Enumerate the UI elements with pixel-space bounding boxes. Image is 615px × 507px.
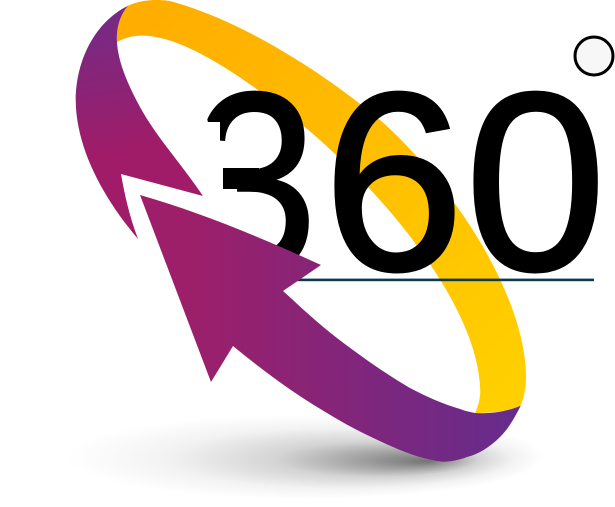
degree circle bbox=[575, 37, 613, 75]
yellow ring band bbox=[117, 0, 526, 413]
number 360: 0 bbox=[465, 40, 606, 324]
purple arrow bbox=[140, 195, 521, 462]
ground shadow bbox=[65, 415, 545, 499]
purple arrow tail bbox=[76, 6, 203, 239]
number 360: 3 bbox=[193, 39, 317, 324]
baseline rule bbox=[290, 279, 594, 281]
number 360: 6 bbox=[323, 40, 464, 324]
number 360 bbox=[207, 90, 598, 274]
